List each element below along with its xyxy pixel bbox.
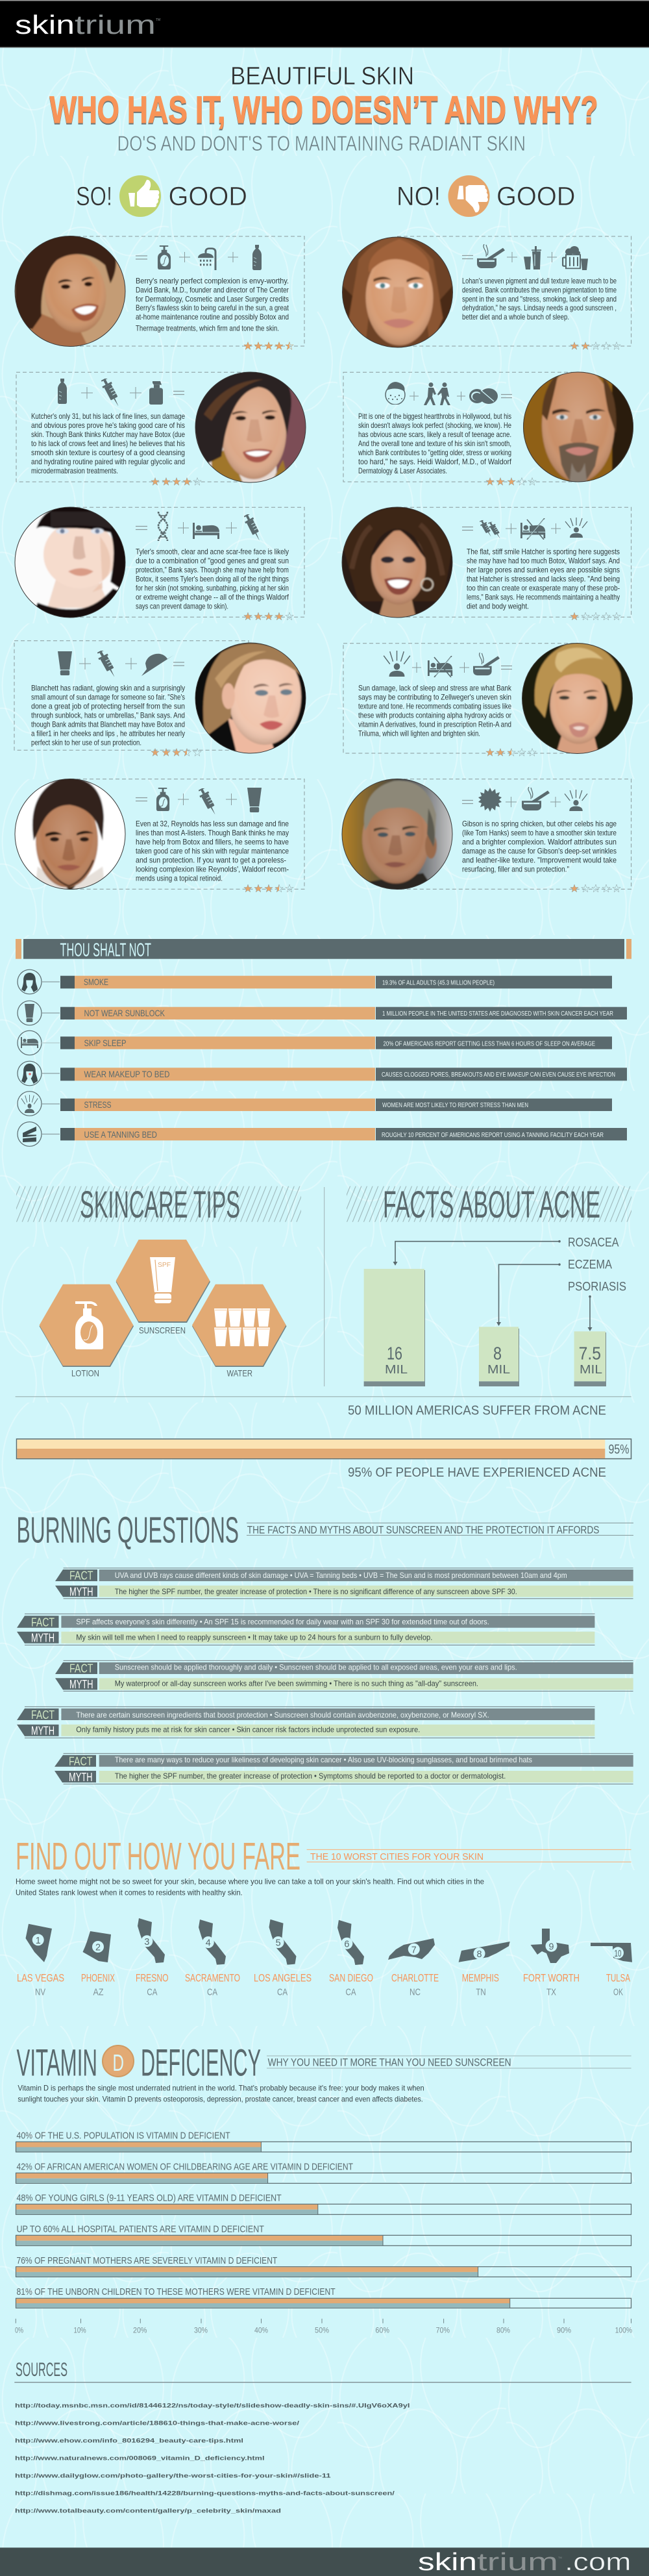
text: Reynolds: taken good care of his skin with regular maintenance [136,846,289,855]
heading: skincare tips [16,1184,301,1226]
axis: 30% [194,2325,208,2334]
city 2: Phoenix: AZ [93,1987,104,1998]
text: Kutcher: Kutcher's only 31, but his lack of fine lines, sun damage [31,412,185,421]
text: Gibson: and leather-like texture. "Improvement would take [462,855,617,864]
row: smoke [18,969,612,994]
text: Kutcher: to his lack of crows feet and lines) he believes that his [31,439,185,448]
fact and myth pair 5: MYTH [69,1770,92,1784]
city 8: Memphis [459,1942,510,1998]
heading: no good: NO! [397,181,441,211]
heading: so good: SO! [76,181,112,211]
footer logo: .com [565,2549,631,2576]
text: Pitt: Pitt is one of the biggest heartthrobs in Hollywood, but his [358,412,511,421]
text: Pitt: too hard," he says. Heidi Waldorf, M.D., of Waldorf [358,457,512,466]
city 6: San Diego: CA [345,1987,356,1998]
intro text [16,1877,484,1897]
logo [15,10,160,40]
portrait: Renee Zellweger [519,640,636,757]
axis: 50% [315,2325,329,2334]
text: Tyler: due to a combination of "good genes and great sun [136,556,289,565]
hexagon: sunscreen [116,1240,210,1335]
rating stars [151,748,201,756]
text: Reynolds: Even at 32, Reynolds has less sun damage and fine [136,819,289,828]
arrow: eczema [496,1257,613,1326]
heading: burning questions [17,1510,633,1551]
city 8: Memphis: 8 [476,1949,482,1960]
city 6: San Diego: SAN DIEGO [329,1972,373,1984]
icon row: water, syringe, pump bottle [58,377,184,409]
text: Zellweger: texture and tone. He recommends combating issues like [358,701,511,710]
stat bar: 42 percent [16,2161,631,2183]
bar: psoriasis: 7.5 [579,1343,601,1363]
source list [15,2403,410,2515]
text: Hatcher: too thin can create or exasperate many of these prob- [467,583,620,592]
stat bar: 42 percent: 42% OF AFRICAN AMERICAN WOMEN OF CHILDBEARING AGE ARE VITAMIN D DEFICIENT [17,2161,353,2172]
axis: 100% [615,2325,632,2334]
fact and myth pair 4: There are certain sunscreen ingredients that boost protection • Sunscreen should contain avobenzone, oxybenzone, or Mexoryl SX. [76,1710,489,1719]
city 7: Charlotte: NC [410,1987,421,1998]
text: Berry: David Bank, M.D., founder and director of The Center [136,285,289,294]
intro text: sunlight touches your skin. Vitamin D prevents osteoporosis, depression, prostate cancer, breast cancer and even affects diabetes. [18,2095,423,2104]
icon: thumbs down [448,175,489,217]
city 6: San Diego [329,1920,373,1998]
bar: eczema [479,1327,519,1386]
fact and myth pair 3: Sunscreen should be applied thoroughly and daily • Sunscreen should be applied to all exposed areas, even your ears and lips. [115,1663,517,1672]
fact and myth pair 3: FACT [69,1662,93,1675]
text: Blanchett: done a great job of protecting herself from the sun [31,701,185,710]
rating stars [486,748,536,756]
text: Kutcher: microdermabrasion treatments. [31,466,118,475]
axis: 70% [436,2325,450,2334]
text: Reynolds: looking complexion like Reynolds', Waldorf recom- [136,864,289,873]
rating stars [244,612,293,620]
bar: rosacea: MIL [385,1362,408,1376]
progress bar: 95 percent [17,1439,631,1458]
city 10: Tulsa: 10 [614,1948,622,1959]
panel: Teri Hatcher [339,504,631,621]
text: Reynolds [136,819,289,882]
fact and myth pair 3: My waterproof or all-day sunscreen works after I've been swimming • There is no such thing as "all-day" sunscreen. [115,1679,478,1688]
hexagon: lotion [40,1284,134,1378]
heading: vitamin d deficiency: VITAMIN [17,2042,97,2084]
panel: Lindsay Lohan [339,234,631,351]
axis [15,2319,632,2334]
portrait: Cate Blanchett [192,640,309,757]
footer logo: TM [558,2556,562,2559]
arrow: psoriasis [568,1279,626,1331]
city 9: Fort Worth: 9 [549,1941,554,1952]
text: Tyler: Botox, it seems Tyler's been doing all of the right things [136,574,289,583]
hexagon: water: WATER [227,1368,252,1378]
stat bar: 40 percent [16,2130,631,2152]
city 10: Tulsa: TULSA [606,1972,630,1984]
arrow: rosacea: ROSACEA [568,1235,619,1249]
heading: so good: GOOD [169,181,247,211]
stat bar: 76 percent: 76% OF PREGNANT MOTHERS ARE SEVERELY VITAMIN D DEFICIENT [17,2255,277,2266]
panel: Liv Tyler [12,503,304,621]
rating stars [244,342,293,349]
text: Blanchett [31,683,185,747]
row: stress [18,1092,612,1116]
city 4: Sacramento [185,1919,240,1998]
fact and myth pair 5: FACT [69,1754,92,1768]
portrait: Liv Tyler [14,506,126,618]
intro text: Vitamin D is perhaps the single most underrated nutrient in the world. That's probably because it's free: your body makes it when [18,2083,424,2092]
footer [0,2547,649,2576]
text: Hatcher: she may have had too much Botox, Waldorf says. And [467,556,620,565]
heading: vitamin d deficiency [17,2042,631,2084]
heading: so good [76,175,247,217]
panel: Cate Blanchett [14,640,309,757]
section: burning questions [17,1510,633,1784]
text: Berry: Berry's flawless skin to being careful in the sun, a great [136,303,289,312]
text: Pitt: Dermatology & Laser Associates. [358,466,447,475]
text: Tyler: for her skin (not smoking, sunbathing, picking at her skin [136,583,289,592]
logo: TM [156,18,160,22]
stat bar: 60 percent [16,2223,631,2245]
heading: sources: SOURCES [16,2359,67,2381]
footer logo: skin [418,2549,477,2576]
city 8: Memphis: TN [476,1987,486,1998]
subtitle: DO'S AND DONT'S TO MAINTAINING RADIANT SKIN [117,132,526,155]
text: Kutcher: and obvious pores prove he's taking good care of his [31,421,185,430]
text: Zellweger: says may be contributing to Zellweger's uneven skin [358,692,511,701]
portrait: Brad Pitt [523,371,633,482]
fact and myth pair 4: MYTH [31,1723,55,1738]
heading: no good [397,175,575,217]
city 1: Las Vegas [17,1924,64,1998]
text: Tyler: or extreme weight change -- all of the things Waldorf [136,592,289,601]
city 10: Tulsa: OK [613,1987,623,1998]
fact and myth pair 1 [55,1568,633,1599]
city 1: Las Vegas: NV [35,1987,45,1998]
text: Pitt [358,412,512,475]
fact and myth pair 3: MYTH [69,1677,93,1691]
bar: psoriasis [574,1331,606,1386]
bar: rosacea [364,1269,425,1386]
text: Gibson: damage as the cause for Gibson's deep-set wrinkles [462,846,617,855]
source list: http://today.msnbc.msn.com/id/81446122/ns/today-style/t/slideshow-deadly-skin-sins/#.UIgV6oXA9yI [15,2403,410,2410]
city 4: Sacramento: CA [207,1987,217,1998]
rating stars [244,884,293,892]
text: Hatcher: her large pores and sunken eyes are possible signs [467,565,620,574]
text: Lohan [462,276,617,321]
title block [49,62,598,155]
progress bar: 95 percent: 95% [609,1442,630,1457]
fact and myth pair 2: FACT [31,1616,55,1629]
city 2: Phoenix: 2 [95,1942,101,1953]
heading: vitamin d deficiency: DEFICIENCY [141,2042,261,2084]
intro text: United States rank lowest when it comes to residents with healthy skin. [16,1888,243,1897]
stat: 95 percent: 95% OF PEOPLE HAVE EXPERIENCED ACNE [348,1466,606,1480]
intro text: Home sweet home might not be so sweet for your skin, because where you live can take a toll on your skin's health. Find out which cities in the [16,1877,484,1886]
stat: 50 million: 50 MILLION AMERICAS SUFFER FROM ACNE [348,1403,606,1418]
portrait: Ryan Reynolds [12,775,129,892]
stat bar: 81 percent [16,2286,631,2308]
text: Blanchett: small amount of sun damage for someone so fair. "She's [31,692,185,701]
portrait: Lindsay Lohan [339,234,456,351]
source list: http://www.totalbeauty.com/content/gallery/p_celebrity_skin/maxad [15,2508,281,2515]
row: skip sleep: 20% OF AMERICANS REPORT GETTING LESS THAN 6 HOURS OF SLEEP ON AVERAGE [383,1040,595,1048]
city 2: Phoenix: PHOENIX [81,1972,115,1984]
city 1: Las Vegas: LAS VEGAS [17,1972,64,1984]
text: Berry: Berry's nearly perfect complexion is envy-worthy. [136,276,289,285]
fact and myth pair 2 [17,1614,594,1645]
banner: THOU SHALT NOT [60,940,151,960]
row: wear makeup to bed: WEAR MAKEUP TO BED [84,1069,170,1079]
city 3: Fresno: FRESNO [136,1972,169,1984]
city 7: Charlotte [388,1938,439,1998]
text: Tyler: says can prevent damage to skin). [136,601,228,610]
logo: skin [15,10,75,40]
icon row: acne, people, pills [386,382,512,405]
heading: find out how you fare: THE 10 WORST CITIES FOR YOUR SKIN [310,1851,484,1862]
source list: http://www.livestrong.com/article/188610-things-that-make-acne-worse/ [15,2420,299,2427]
fact and myth pair 4: Only family history puts me at risk for skin cancer • Skin cancer risk factors include unprotected sun exposure. [76,1725,420,1734]
source list: http://www.naturalnews.com/008069_vitamin_D_deficiency.html [15,2455,265,2462]
text: Gibson: resurfacing, filler and sun protection." [462,864,569,873]
fact and myth pair 2: SPF affects everyone's skin differently • An SPF 15 is recommended for daily wear with an SPF 30 for extended time out of doors. [76,1618,489,1627]
banner [16,939,631,960]
fact and myth pair 5: There are many ways to reduce your likeliness of developing skin cancer • Also use UV-blocking sunglasses, and broad brimmed hats [115,1755,532,1764]
row: not wear sunblock: NOT WEAR SUNBLOCK [84,1008,165,1018]
source list: http://www.dailyglow.com/photo-gallery/the-worst-cities-for-your-skin#/slide-11 [15,2473,332,2480]
city 7: Charlotte: CHARLOTTE [391,1972,439,1984]
portrait: Mel Gibson [339,775,456,892]
text: Blanchett: though Bank admits that Blanchett may have Botox and [31,719,185,729]
text: Hatcher [467,547,620,610]
footer logo [418,2549,631,2576]
stat bar: 60 percent: UP TO 60% ALL HOSPITAL PATIENTS ARE VITAMIN D DEFICIENT [17,2223,264,2234]
text: Blanchett: Blanchett has radiant, glowing skin and a surprisingly [31,683,185,692]
city 3: Fresno [136,1918,169,1998]
bar: eczema: 8 [493,1343,502,1363]
text: Berry [136,276,289,332]
text: Pitt: And the overall tone and texture of his skin isn't smooth, [358,439,511,448]
text: Gibson: Gibson is no spring chicken, but other celebs his age [462,819,617,828]
rating stars [486,478,536,485]
section: skincare tips [16,1184,301,1378]
text: Pitt: which Bank contributes to "getting older, stress or working [358,448,511,457]
panel: Ryan Reynolds [12,775,304,892]
text: Kutcher [31,412,185,475]
city 2: Phoenix [81,1931,115,1998]
fact and myth pair 2: My skin will tell me when I need to reapply sunscreen • It may take up to 24 hours for a sunburn to fully develop. [76,1633,432,1642]
text: Zellweger: vitamin A derivatives, found in prescription Retin-A and [358,719,511,729]
section: vitamin d deficiency [15,2042,632,2334]
fact and myth pair 1: MYTH [69,1584,93,1598]
heading: skincare tips: SKINCARE TIPS [80,1184,240,1226]
icon row: stress, no sleep, cigarette [384,651,512,677]
text: Gibson: and a brighter complexion. Waldorf attributes sun [462,837,617,846]
text: Gibson [462,819,617,873]
row: use a tanning bed [18,1122,627,1146]
text: Kutcher: skin. Though Bank thinks Kutcher may have Botox (due [31,430,185,439]
bar: rosacea: 16 [387,1343,402,1363]
fact and myth pair 1: FACT [69,1569,93,1582]
stat bar: 48 percent [16,2192,631,2214]
heading: vitamin d deficiency: D [113,2049,124,2076]
fact and myth pair 5: The higher the SPF number, the greater increase of protection • Symptoms should be reported to a doctor or dermatologist. [115,1771,506,1781]
city 9: Fort Worth: TX [546,1987,556,1998]
row: stress: STRESS [84,1099,112,1110]
city 7: Charlotte: 7 [411,1944,417,1955]
city 9: Fort Worth [523,1929,580,1998]
text: Kutcher: smooth skin texture is courtesy of a good cleansing [31,448,185,457]
city 8: Memphis: MEMPHIS [462,1972,499,1984]
heading: find out how you fare: FIND OUT HOW YOU FARE [16,1835,300,1878]
text: Zellweger: Sun damage, lack of sleep and stress are what Bank [358,683,512,692]
text: Hatcher: that Hatcher is stressed and lacks sleep. "And being [467,574,620,583]
text: Pitt: has obvious acne scars, likely a result of teenage acne. [358,430,511,439]
section: facts about acne [347,1184,631,1386]
bar: eczema: MIL [487,1362,510,1376]
text: Tyler: protection," Bank says. Though she may have help from [136,565,289,574]
icon row: lotion, shower, water [136,245,262,270]
source list: http://www.ehow.com/info_8016294_beauty-care-tips.html [15,2438,243,2445]
logo: trium [75,10,156,40]
fact and myth pair 1: UVA and UVB rays cause different kinds of skin damage • UVA = Tanning beds • UVB = The Sun and is most predominant between 10am and 4pm [115,1571,567,1580]
text: Berry: at-home maintenance routine and possibly Botox and [136,312,289,321]
city 5: Los Angeles: CA [277,1987,288,1998]
city 3: Fresno: 3 [144,1936,149,1947]
icon row: dna, sleep, syringe [136,512,263,544]
axis: 80% [496,2325,510,2334]
portrait: Teri Hatcher [339,504,456,621]
heading: vitamin d deficiency: WHY YOU NEED IT MORE THAN YOU NEED SUNSCREEN [268,2057,511,2069]
text: Reynolds: and sun protection. If you want to get a poreless- [136,855,286,864]
header bar [0,0,649,48]
text: Reynolds: mends using a topical retinoid. [136,873,223,882]
icon row: syringes, no sleep, stress [462,518,587,540]
intro text [18,2083,424,2104]
heading: burning questions: BURNING QUESTIONS [17,1510,239,1551]
city 4: Sacramento: 4 [206,1938,211,1949]
text: Berry: Thermage treatments, which firm and tone the skin. [136,323,279,332]
fact and myth pair 1: The higher the SPF number, the greater increase of protection • There is no significant difference of any sunscreen above SPF 30. [115,1587,517,1596]
axis: 40% [254,2325,268,2334]
text: Hatcher: diet and body weight. [467,601,529,610]
text: Tyler [136,547,289,610]
arrow: rosacea [393,1235,619,1266]
row: stress: WOMEN ARE MOST LIKELY TO REPORT STRESS THAN MEN [382,1102,528,1109]
text: Zellweger: these with products containing alpha hydroxy acids or [358,710,511,719]
stat bar: 48 percent: 48% OF YOUNG GIRLS (9-11 YEARS OLD) ARE VITAMIN D DEFICIENT [17,2192,282,2203]
rating stars [151,478,201,485]
axis: 60% [375,2325,389,2334]
hexagon: sunscreen: SPF [158,1262,171,1269]
city 1: Las Vegas: 1 [36,1935,41,1946]
icon row: sun, cigarette, stress [462,787,587,812]
panel: Renee Zellweger [343,640,636,757]
hexagon: lotion: LOTION [71,1368,99,1378]
row: wear makeup to bed [18,1061,627,1086]
panel: Halle Berry [12,232,304,349]
panel: Mel Gibson [339,775,631,892]
axis: 90% [557,2325,571,2334]
stat bar: 40 percent: 40% OF THE U.S. POPULATION IS VITAMIN D DEFICIENT [17,2130,230,2141]
row: not wear sunblock [18,1001,627,1025]
section: sources [14,2359,631,2515]
city 5: Los Angeles: 5 [276,1938,281,1949]
axis: 20% [133,2325,147,2334]
text: Blanchett: perfect skin to her use of sun protection. [31,738,141,747]
city 5: Los Angeles: LOS ANGELES [254,1972,312,1984]
icon row: tube, syringe, hat [58,649,184,680]
city 10: Tulsa [591,1943,632,1998]
city 6: San Diego: 6 [344,1938,349,1949]
rating stars [570,612,620,620]
row: smoke: 19.3% OF ALL ADULTS (45.3 MILLION PEOPLE) [382,979,495,987]
fact and myth pair 4: FACT [31,1708,55,1721]
text: Kutcher: and hydrating routine paired with regular glycolic and [31,457,185,466]
text: Tyler: Tyler's smooth, clear and acne scar-free face is likely [136,547,289,556]
text: Zellweger: Triluma, which will lighten and brighten skin. [358,729,480,738]
title: beautiful skin: BEAUTIFUL SKIN [230,62,414,90]
axis: 0% [15,2325,23,2334]
text: Blanchett: through sunblock, hats or umbrellas," Bank says. And [31,710,185,719]
text: Hatcher: The flat, stiff smile Hatcher is sporting here suggests [467,547,620,556]
city 5: Los Angeles [254,1919,312,1998]
source list: http://dishmag.com/issue186/health/14228/burning-questions-myths-and-facts-about-sunscreen/ [15,2490,395,2497]
portrait: Halle Berry [12,232,129,349]
row: skip sleep [18,1031,612,1055]
fact and myth pair 3 [55,1660,633,1692]
fact and myth pair 2: MYTH [31,1631,55,1645]
text: Lohan: better diet and a whole bunch of sleep. [462,312,569,321]
text: Zellweger [358,683,512,738]
row: use a tanning bed: USE A TANNING BED [84,1129,157,1140]
bar: psoriasis: MIL [580,1362,602,1376]
city 3: Fresno: CA [147,1987,157,1998]
row: skip sleep: SKIP SLEEP [84,1038,126,1048]
stat bar: 76 percent [16,2255,631,2277]
icon row: cigarette, drink, beer [462,244,588,270]
section: thou shalt not [16,939,631,1146]
hexagon: water [192,1284,287,1378]
text: Gibson: (like Tom Hanks) seem to have a smoother skin texture [462,828,617,837]
city 9: Fort Worth: FORT WORTH [523,1972,580,1984]
rating stars [570,884,620,892]
icon row: lotion, syringe, tube [136,786,262,818]
icon: thumbs up [119,175,161,217]
city 4: Sacramento: SACRAMENTO [185,1972,240,1984]
text: Reynolds: lines than most A-listers. Though Bank thinks he may [136,828,289,837]
section: find out how you fare [16,1835,632,1998]
fact and myth pair 4 [17,1707,594,1738]
rating stars [570,342,620,349]
arrow: eczema: ECZEMA [568,1257,613,1271]
axis: 10% [74,2325,86,2334]
hexagon: sunscreen: SUNSCREEN [139,1325,186,1335]
arrow: psoriasis: PSORIASIS [568,1279,626,1294]
text: Pitt: skin doesn't always look perfect (shocking, we know). He [358,421,511,430]
text: Berry: for Dermatology, Cosmetic and Laser Surgery credits [136,294,289,303]
stat bar: 81 percent: 81% OF THE UNBORN CHILDREN TO THESE MOTHERS WERE VITAMIN D DEFICIENT [17,2286,336,2297]
text: Blanchett: a filler1 in her cheeks and lips , he attributes her nearly [31,729,185,738]
footer logo: trium [477,2549,558,2576]
panel: Brad Pitt [343,368,637,486]
row: smoke: SMOKE [84,977,108,987]
text: Reynolds: have help from Botox and fillers, he seems to have [136,837,289,846]
portrait: Ashton Kutcher [195,371,306,483]
panel: Ashton Kutcher [16,366,309,486]
fact and myth pair 5 [55,1753,633,1784]
heading: no good: GOOD [496,181,575,211]
text: Lohan: spent in the sun and "stress, smoking, lack of sleep and [462,294,617,303]
